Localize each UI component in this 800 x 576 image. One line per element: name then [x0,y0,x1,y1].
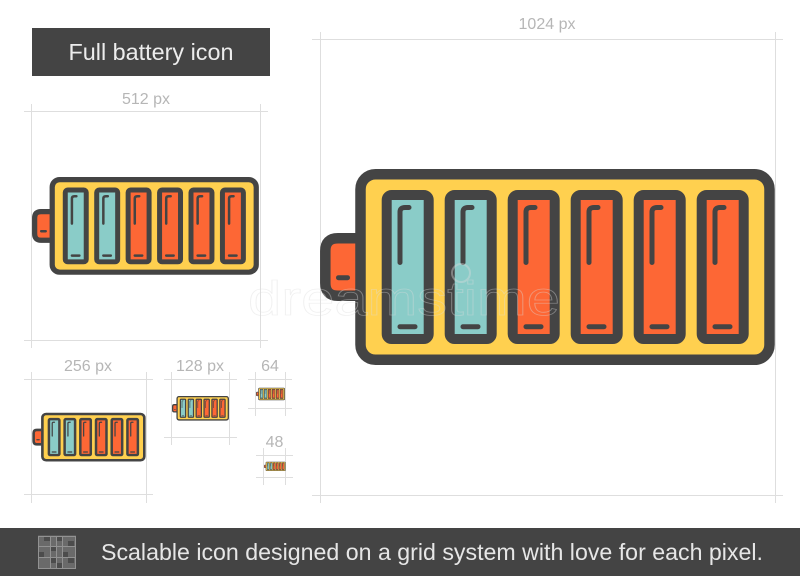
title banner: Full battery icon [68,39,234,65]
icon: pixel grid [38,536,76,568]
icon: battery 48 px [264,462,285,471]
guide frame: 48 px: 48 [266,434,284,451]
title banner [32,28,270,76]
icon: battery 128 px [173,397,228,420]
icon: battery 1024 px [325,174,770,360]
footer text: Scalable icon designed on a grid system with love for each pixel. [101,539,763,565]
guide frame: 64 px [248,358,292,416]
guide frame: 256 px: 256 px [64,358,112,375]
icon: battery 512 px [35,180,256,272]
guide frame: 1024 px: 1024 px [519,16,575,33]
guide frame: 128 px [164,358,237,445]
footer bar [0,528,800,576]
guide frame: 128 px: 128 px [176,358,224,375]
guide frame: 256 px [24,358,153,503]
icon: battery 64 px [256,388,285,400]
guide frame: 64 px: 64 [261,358,279,375]
guide frame: 512 px [24,91,268,348]
guide frame: 48 px [256,434,293,485]
guide frame: 512 px: 512 px [122,91,170,108]
icon: battery 256 px [34,414,144,460]
watermark [248,264,560,326]
watermark: dreamstime [248,273,560,326]
